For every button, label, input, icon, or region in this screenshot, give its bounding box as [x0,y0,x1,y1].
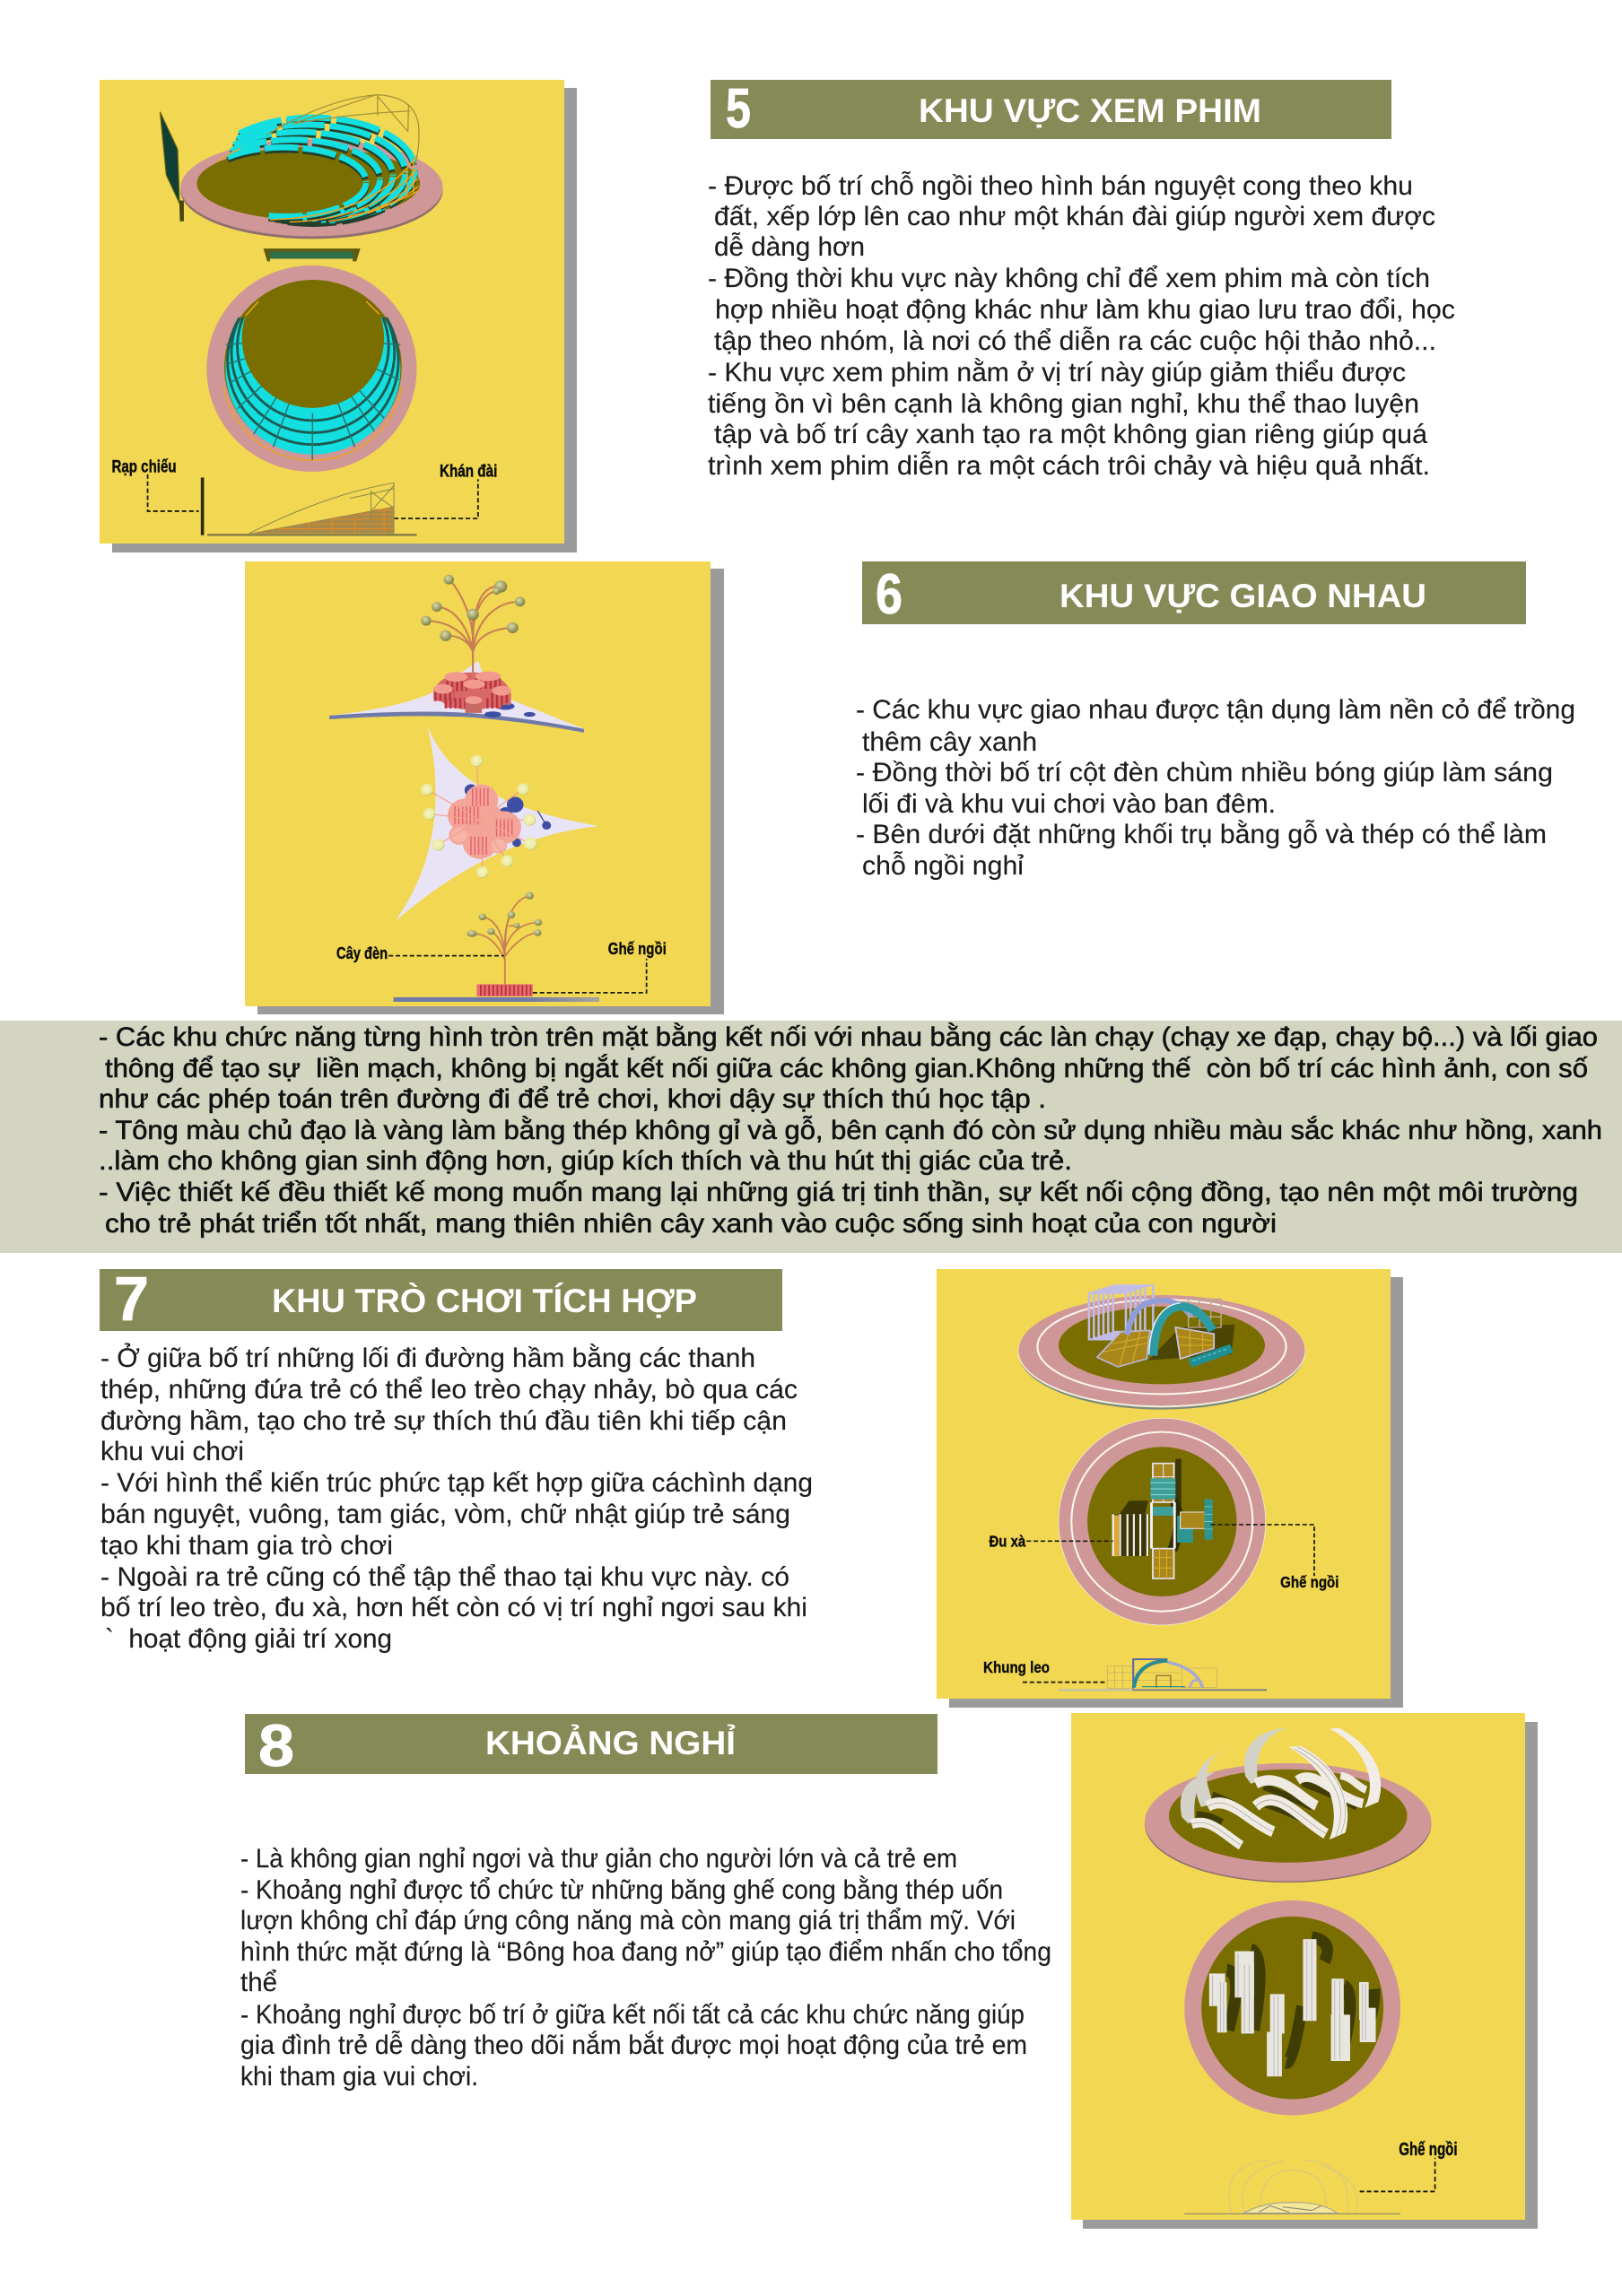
text block: section 7 description [100,1343,813,1654]
panel: summary band: - Tông màu chủ đạo là vàng làm bằng thép không gỉ và gỗ, bên cạnh đó còn sử dụng nhiều màu sắc khác như hồng, xanh [99,1116,1602,1145]
header: section 6: 6 [876,563,903,626]
text block: section 5 description: tiếng ồn vì bên cạnh là không gian nghỉ, khu thể thao luyện [708,389,1419,419]
text block: section 5 description: tập và bố trí cây xanh tạo ra một không gian riêng giúp quá [714,420,1428,449]
label: Khung leo: Khung leo [983,1658,1050,1676]
text block: section 7 description: - Ở giữa bố trí những lối đi đường hầm bằng các thanh [100,1343,755,1373]
icon: perspective view of climbing frame [1018,1285,1305,1410]
text block: section 7 description: - Ngoài ra trẻ cũng có thể tập thể thao tại khu vực này. có [100,1562,789,1592]
text block: section 8 description: thể [240,1968,277,1997]
label: Đu xà: Đu xà [989,1532,1026,1550]
panel: summary band: ..làm cho không gian sinh động hơn, giúp kích thích và thu hút thị giác của trẻ. [99,1146,1072,1176]
header: section 8: 8 [258,1712,294,1779]
panel: summary band: thông để tạo sự liền mạch, không bị ngắt kết nối giữa các không gian.Không những thế còn bố trí các hình ảnh, con số [105,1054,1588,1083]
header: section 5 [711,78,1391,140]
text block: section 8 description: lượn không chỉ đáp ứng công năng mà còn mang giá trị thẩm mỹ. Với [240,1906,1016,1935]
icon: plan view of climbing frame [1059,1418,1266,1625]
text block: section 6 description: - Các khu vực giao nhau được tận dụng làm nền cỏ để trồng [856,695,1575,725]
label: Ghế ngồi: Ghế ngồi [1280,1573,1339,1591]
label: Đu xà [989,1532,1113,1550]
icon: side elevation of screen and stands [201,477,417,535]
panel: summary band: cho trẻ phát triển tốt nhất, mang thiên nhiên cây xanh vào cuộc sống sinh hoạt của con người [105,1209,1277,1239]
text block: section 8 description: - Là không gian nghỉ ngơi và thư giản cho người lớn và cả trẻ em [240,1844,957,1874]
header: section 5: KHU VỰC XEM PHIM [919,92,1261,129]
label: Ghế ngồi [1211,1525,1339,1591]
icon: plan view of lamp tree on triangular lawn [395,725,598,921]
icon: plan view of curved benches [1184,1900,1400,2115]
text block: section 7 description: tạo khi tham gia trò chơi [100,1531,393,1561]
text block: section 7 description: bố trí leo trèo, đu xà, hơn hết còn có vị trí nghỉ ngơi sau khi [100,1593,807,1622]
panel: intersection area illustration [245,561,724,1014]
icon: perspective view of cinema seating [160,95,443,239]
text block: section 5 description: đất, xếp lớp lên cao như một khán đài giúp người xem được [714,202,1435,231]
text block: section 6 description: - Đồng thời bố trí cột đèn chùm nhiều bóng giúp làm sáng [856,758,1553,787]
text block: section 7 description: thép, những đứa trẻ có thể leo trèo chạy nhảy, bò qua các [100,1375,798,1405]
text block: section 5 description [708,171,1455,481]
header: section 8: KHOẢNG NGHỈ [485,1725,736,1761]
text block: section 5 description: trình xem phim diễn ra một cách trôi chảy và hiệu quả nhất. [708,451,1430,481]
text block: section 7 description: ` hoạt động giải trí xong [105,1624,392,1654]
icon: side elevation of lamp tree [394,892,599,1002]
label: Khán đài [394,462,497,518]
text block: section 5 description: tập theo nhóm, là nơi có thể diễn ra các cuộc hội thảo nhỏ... [714,326,1436,356]
text block: section 8 description: hình thức mặt đứng là “Bông hoa đang nở” giúp tạo điểm nhấn cho tổng [240,1937,1051,1967]
label: Ghế ngồi: Ghế ngồi [608,939,667,958]
text block: section 8 description: gia đình trẻ dễ dàng theo dõi nắm bắt được mọi hoạt động của trẻ em [240,2031,1027,2060]
text block: section 6 description [856,695,1575,881]
panel: rest area illustration [1071,1713,1538,2229]
header: section 7: 7 [114,1264,149,1334]
icon: side elevation of curved benches [1184,2160,1400,2213]
icon: perspective view of lamp tree [329,575,584,733]
text block: section 8 description: - Khoảng nghỉ được bố trí ở giữa kết nối tất cả các khu chức năng giúp [240,2000,1025,2030]
text block: section 8 description [240,1844,1051,2092]
icon: perspective view of curved benches [1145,1727,1431,1883]
header: section 8 [245,1712,937,1779]
label: Ghế ngồi: Ghế ngồi [1399,2140,1458,2160]
text block: section 8 description: - Khoảng nghỉ được tổ chức từ những băng ghế cong bằng thép uốn [240,1875,1003,1905]
header: section 6: KHU VỰC GIAO NHAU [1060,578,1426,614]
panel: summary band: - Việc thiết kế đều thiết kế mong muốn mang lại những giá trị tinh thần, sự kết nối cộng đồng, tạo nên một môi trường [99,1178,1578,1207]
text block: section 5 description: - Đồng thời khu vực này không chỉ để xem phim mà còn tích [708,264,1430,293]
label: Ghế ngồi [533,939,667,993]
text block: section 5 description: - Được bố trí chỗ ngồi theo hình bán nguyệt cong theo khu [708,171,1413,201]
text block: section 6 description: thêm cây xanh [862,727,1037,757]
panel: summary band: - Các khu chức năng từng hình tròn trên mặt bằng kết nối với nhau bằng các làn chạy (chạy xe đạp, chạy bộ...) và lối giao [99,1022,1598,1052]
text block: section 5 description: dễ dàng hơn [714,232,865,262]
panel: movie area illustration [100,80,577,552]
text block: section 5 description: hợp nhiều hoạt động khác như làm khu giao lưu trao đổi, học [715,295,1455,325]
header: section 7 [100,1264,782,1334]
panel: integrated play area illustration [937,1269,1403,1708]
text block: section 5 description: - Khu vực xem phim nằm ở vị trí này giúp giảm thiểu được [708,358,1406,387]
header: section 6 [862,561,1526,626]
text block: section 7 description: đường hầm, tạo cho trẻ sự thích thú đầu tiên khi tiếp cận [100,1406,787,1436]
text block: section 6 description: chỗ ngồi nghỉ [862,851,1024,881]
panel: summary band [0,1021,1622,1253]
text block: section 6 description: - Bên dưới đặt những khối trụ bằng gỗ và thép có thể làm [856,820,1547,849]
text block: section 7 description: bán nguyệt, vuông, tam giác, vòm, chữ nhật giúp trẻ sáng [100,1500,790,1529]
text block: section 6 description: lối đi và khu vui chơi vào ban đêm. [862,789,1276,819]
text block: section 8 description: khi tham gia vui chơi. [240,2062,478,2092]
panel: summary band: như các phép toán trên đường đi để trẻ chơi, khơi dậy sự thích thú học tập . [99,1084,1046,1114]
icon: side elevation of climbing frame [1059,1659,1267,1691]
icon: screen seen from above [264,248,361,261]
label: Khán đài: Khán đài [440,462,497,481]
header: section 7: KHU TRÒ CHƠI TÍCH HỢP [272,1282,697,1319]
label: Rạp chiếu: Rạp chiếu [112,457,177,476]
text block: section 7 description: - Với hình thể kiến trúc phức tạp kết hợp giữa cáchình dạng [100,1468,813,1498]
label: Khung leo [983,1658,1105,1683]
label: Ghế ngồi [1360,2140,1458,2191]
label: Cây đèn: Cây đèn [336,944,388,962]
icon: plan view of cinema seating [206,265,417,472]
label: Rạp chiếu [112,457,199,511]
header: section 5: 5 [726,78,751,140]
text block: section 7 description: khu vui chơi [100,1437,244,1466]
